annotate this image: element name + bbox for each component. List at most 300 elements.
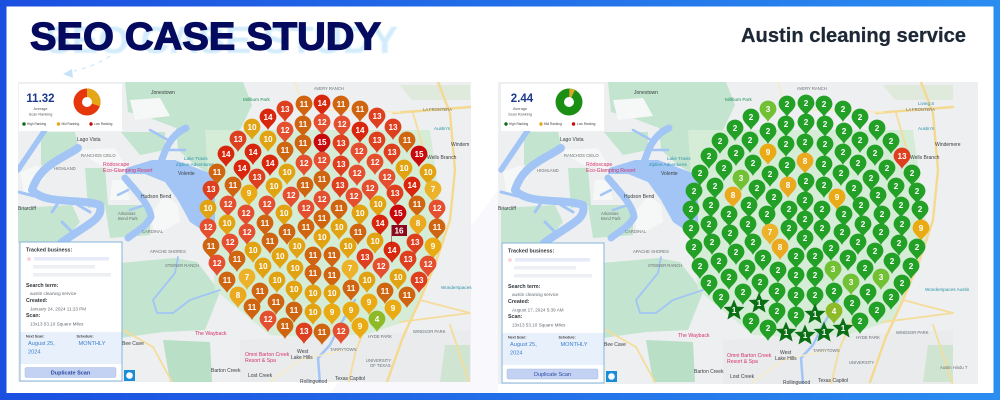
ranking pins: 2: [863, 264, 868, 273]
ranking pins: 10: [373, 200, 383, 209]
map labels: Resort & Spa: [727, 359, 758, 365]
ranking pins: 2: [803, 215, 808, 224]
donut chart: [74, 88, 101, 116]
ranking pins: 13: [387, 148, 397, 157]
map labels: Zipline Adventures: [649, 162, 687, 167]
ranking pins: 13: [372, 136, 382, 145]
next scan strip: August 25,: [28, 341, 55, 347]
map labels: Jonestown: [634, 90, 658, 96]
map labels: Ródoscape: [103, 162, 129, 168]
ranking pins: 7: [768, 228, 773, 237]
next scan strip: MONTHLY: [560, 342, 588, 348]
map labels: Austin Hindu T: [940, 365, 968, 370]
ranking pins: 10: [327, 289, 337, 298]
panel: right map (after): [483, 80, 1000, 390]
ranking pins: 10: [362, 276, 372, 285]
average score: 2.44: [511, 93, 534, 105]
ranking pins: 12: [370, 158, 380, 167]
map labels: TARRYTOWN: [813, 348, 840, 353]
ranking pins: 2: [755, 184, 760, 193]
ranking pins: 2: [852, 184, 857, 193]
ranking pins: 2: [846, 254, 851, 263]
ranking pins: 12: [423, 260, 433, 269]
blurred business details: [508, 258, 592, 278]
ranking pins: 2: [803, 196, 808, 205]
map labels: Hudson Bend: [141, 194, 172, 200]
panel: tracked business: January 24, 2024 11:23 PM: [30, 306, 86, 312]
ranking pins: 2: [823, 120, 828, 129]
ranking pins: 12: [286, 191, 296, 200]
ranking pins: 2: [747, 201, 752, 210]
ranking pins: 3: [849, 278, 854, 287]
ranking pins: 3: [879, 273, 884, 282]
map labels: Texas Capitol: [335, 376, 365, 382]
next scan strip: Schedule:: [76, 334, 94, 338]
ranking pins: 2: [689, 205, 694, 214]
average score: 11.32: [26, 93, 55, 105]
ranking pins: 2: [842, 210, 847, 219]
ranking pins: 11: [302, 223, 311, 232]
ranking pins: 10: [292, 242, 302, 251]
ranking pins: 13: [335, 181, 345, 190]
panel: tracked business: 13x13 53.10 Square Miles: [30, 322, 84, 326]
map labels: Wells Branch: [910, 155, 940, 161]
ranking pins: 10: [269, 182, 279, 191]
subtitle: Austin cleaning service: [741, 24, 966, 47]
map labels: UNIVERSITY: [366, 358, 391, 363]
ranking pins: 1: [822, 328, 827, 337]
title: SEO CASE STUDY: [45, 20, 398, 62]
ranking pins: 2: [698, 169, 703, 178]
ranking pins: 13: [206, 185, 216, 194]
ranking pins: 2: [775, 287, 780, 296]
icon: collapse button: [606, 371, 617, 382]
ranking pins: 9: [431, 242, 436, 251]
ranking pins: 2: [766, 324, 771, 333]
map labels: Eco-Glamping Resort: [103, 168, 153, 174]
ranking pins: 2: [727, 210, 732, 219]
donut chart: [556, 88, 582, 116]
map labels: Rollingwood: [300, 379, 327, 385]
ranking pins: 2: [787, 224, 792, 233]
ranking pins: 14: [317, 99, 327, 108]
ranking pins: 9: [247, 189, 252, 198]
ranking pins: 12: [317, 195, 327, 204]
ranking pins: 2: [840, 228, 845, 237]
map labels: APACHE SHORES: [150, 249, 186, 254]
panel: tracked business: [502, 243, 604, 383]
ranking pins: 2: [749, 113, 754, 122]
map labels: Lost Creek: [248, 373, 273, 379]
map labels: Volente: [178, 171, 195, 177]
ranking pins: 12: [354, 147, 364, 156]
panel: tracked business: austin cleaning service: [512, 292, 559, 297]
ranking pins: 2: [734, 248, 739, 257]
panel: tracked business: Created:: [26, 298, 48, 304]
ranking pins: 12: [212, 259, 222, 268]
ranking pins: 11: [403, 291, 412, 300]
ranking pins: 11: [266, 237, 275, 246]
ranking pins: 2: [842, 127, 847, 136]
ranking pins: 2: [866, 288, 871, 297]
panel: tracked business: Tracked business:: [26, 248, 72, 254]
ranking pins: 14: [248, 148, 258, 157]
ranking pins: 2: [776, 266, 781, 275]
ranking pins: 2: [785, 100, 790, 109]
ranking pins: 2: [839, 169, 844, 178]
panel: tracked business: Tracked business:: [508, 248, 554, 254]
map labels: Arkansas: [601, 211, 618, 216]
ranking pins: 13: [360, 253, 370, 262]
map labels: Omni Barton Creek: [245, 352, 290, 358]
ranking pins: 2: [728, 229, 733, 238]
ranking pins: 12: [352, 169, 362, 178]
ranking pins: 2: [850, 299, 855, 308]
ranking pins: 2: [734, 149, 739, 158]
ranking pins: 2: [717, 257, 722, 266]
ranking pins: 12: [337, 120, 347, 129]
next scan strip: [502, 333, 604, 365]
map labels: LA FRONTERA: [906, 107, 935, 112]
map labels: Wonderspaces: [441, 285, 472, 290]
ranking pins: 12: [336, 327, 346, 336]
ranking pins: 3: [766, 105, 771, 114]
map labels: LA FRONTERA: [423, 107, 452, 112]
ranking pins: 2: [915, 187, 920, 196]
ranking pins: 14: [387, 246, 397, 255]
ranking pins: 2: [794, 252, 799, 261]
ranking pins: 10: [275, 252, 285, 261]
ranking pins: 12: [382, 173, 392, 182]
ranking pins: 10: [290, 264, 300, 273]
map labels: STEINER RANCH: [165, 263, 199, 268]
ranking pins: 8: [778, 243, 783, 252]
ranking pins: 2: [879, 228, 884, 237]
ranking pins: 3: [831, 265, 836, 274]
ranking pins: 2: [741, 288, 746, 297]
ranking pins: 3: [739, 174, 744, 183]
map labels: Wonderspaces Austin: [925, 287, 970, 292]
ranking pins: 12: [241, 209, 251, 218]
map labels: Texas Capitol: [818, 378, 848, 384]
map labels: Jonestown: [151, 90, 175, 96]
ranking pins: 2: [875, 124, 880, 133]
ranking pins: 9: [391, 304, 396, 313]
ranking pins: 2: [698, 262, 703, 271]
ranking pins: 2: [841, 148, 846, 157]
map labels: Lake Travis: [184, 156, 208, 161]
ranking pins: 2: [856, 238, 861, 247]
ranking pins: 2: [787, 205, 792, 214]
ranking pins: 2: [751, 238, 756, 247]
ranking pins: 10: [355, 209, 365, 218]
ranking pins: 2: [858, 113, 863, 122]
ranking pins: 11: [328, 271, 337, 280]
ranking pins: 2: [918, 205, 923, 214]
ranking pins: 9: [358, 322, 363, 331]
map labels: Austin's: [918, 126, 935, 131]
ranking pins: 12: [263, 315, 273, 324]
ranking pins: 12: [299, 159, 309, 168]
ranking legend: Mid Ranking: [62, 122, 79, 126]
ranking pins: 11: [283, 228, 292, 237]
ranking pins: 10: [399, 164, 409, 173]
panel: tracked business: August 17, 2024 5:39 AM: [512, 308, 564, 312]
map labels: The Wayback: [195, 331, 227, 337]
ranking pins: 2: [899, 201, 904, 210]
ranking pins: 10: [289, 285, 299, 294]
ranking pins: 2: [765, 210, 770, 219]
ranking pins: 2: [768, 170, 773, 179]
ranking pins: 2: [803, 138, 808, 147]
ranking pins: 2: [710, 238, 715, 247]
ranking pins: 12: [365, 184, 375, 193]
ranking pins: 13: [280, 105, 290, 114]
next scan strip: 2024: [510, 350, 522, 356]
map labels: TARRYTOWN: [330, 347, 357, 352]
ranking pins: 11: [318, 175, 327, 184]
ranking pins: 11: [328, 251, 337, 260]
ranking pins: 13: [897, 152, 907, 161]
title: SEO CASE STUDY: [30, 16, 381, 58]
ranking pins: 4: [375, 315, 380, 324]
ranking pins: 2: [689, 224, 694, 233]
ranking legend: [22, 122, 113, 126]
ranking pins: 7: [245, 273, 250, 282]
ranking pins: 2: [900, 279, 905, 288]
ranking pins: 11: [347, 284, 356, 293]
ranking pins: 2: [909, 262, 914, 271]
ranking pins: 2: [733, 124, 738, 133]
map labels: CARDINAL: [142, 229, 164, 234]
ranking legend: High Ranking: [27, 122, 46, 126]
ranking pins: 14: [237, 164, 247, 173]
ranking pins: 2: [758, 278, 763, 287]
map labels: STEINER RANCH: [648, 263, 682, 268]
map labels: CARDINAL: [625, 229, 647, 234]
ranking pins: 11: [248, 303, 257, 312]
ranking pins: 8: [416, 219, 421, 228]
ranking pins: [200, 95, 445, 345]
map labels: Austin's: [434, 126, 451, 131]
ranking pins: 10: [334, 223, 344, 232]
ranking pins: 2: [889, 137, 894, 146]
ranking pins: 2: [719, 293, 724, 302]
ranking pins: 2: [829, 244, 834, 253]
ranking pins: 2: [794, 291, 799, 300]
ranking pins: 2: [804, 99, 809, 108]
ranking pins: 12: [432, 204, 442, 213]
ranking pins: 1: [784, 328, 789, 337]
ranking pins: 8: [803, 157, 808, 166]
next scan strip: August 25,: [510, 342, 537, 348]
ranking pins: 11: [318, 328, 327, 337]
ranking legend: [504, 122, 596, 126]
map labels: Barton Creek: [211, 368, 241, 374]
ranking pins: 10: [343, 242, 353, 251]
ranking pins: [683, 95, 929, 344]
ranking pins: 10: [272, 276, 282, 285]
map labels: AVERY RANCH: [314, 86, 344, 91]
next scan strip: MONTHLY: [78, 341, 106, 347]
ranking pins: 11: [299, 139, 308, 148]
map labels: WINDSOR PARK: [413, 329, 446, 334]
map labels: HYDE PARK: [856, 335, 880, 340]
ranking pins: 1: [841, 324, 846, 333]
ranking pins: 2: [915, 243, 920, 252]
ranking pins: 2: [861, 220, 866, 229]
map labels: The Wayback: [678, 333, 710, 339]
panel: tracked business: austin cleaning service: [30, 291, 77, 296]
map labels: Ródoscape: [586, 162, 612, 168]
ranking pins: 11: [337, 100, 346, 109]
panel: tracked business: Search term:: [26, 283, 59, 289]
ranking pins: 11: [281, 146, 290, 155]
ranking pins: 10: [317, 233, 327, 242]
ranking pins: 1: [813, 310, 818, 319]
map labels: Millburn Park: [725, 97, 753, 102]
ranking pins: 2: [832, 287, 837, 296]
panel: tracked business: Scan:: [508, 314, 523, 320]
panel: tracked business: Scan:: [26, 313, 41, 319]
ranking pins: 2: [794, 271, 799, 280]
map labels: Windem: [451, 142, 469, 148]
map labels: Eco-Glamping Resort: [586, 168, 636, 174]
ranking pins: 12: [242, 228, 252, 237]
map labels: Bend Park: [601, 216, 621, 221]
next scan strip: Next Scan:: [508, 336, 527, 340]
ranking pins: 2: [875, 306, 880, 315]
map labels: WINDSOR PARK: [896, 330, 929, 335]
ranking pins: 2: [822, 160, 827, 169]
button: duplicate scan: Duplicate Scan: [534, 372, 571, 378]
map labels: HYDE PARK: [368, 334, 392, 339]
ranking pins: 10: [370, 237, 380, 246]
panel: left map (before): [18, 82, 472, 384]
ranking pins: 11: [300, 100, 309, 109]
ranking pins: 13: [336, 139, 346, 148]
ranking pins: 13: [252, 173, 262, 182]
ranking pins: 2: [856, 159, 861, 168]
ranking pins: 2: [751, 159, 756, 168]
ranking pins: 14: [355, 126, 365, 135]
ranking pins: 2: [841, 105, 846, 114]
map labels: West: [297, 349, 309, 355]
ranking pins: 2: [709, 201, 714, 210]
ranking pins: 2: [885, 164, 890, 173]
legend card: [501, 84, 604, 131]
ranking legend: Low Ranking: [577, 122, 596, 126]
ranking pins: 2: [766, 127, 771, 136]
ranking pins: 9: [835, 193, 840, 202]
ranking pins: 14: [221, 150, 231, 159]
ranking pins: 14: [265, 159, 275, 168]
ranking pins: 13: [388, 123, 398, 132]
ranking pins: 11: [301, 181, 310, 190]
ranking pins: 15: [414, 150, 424, 159]
ranking pins: 2: [772, 193, 777, 202]
ranking pins: 10: [248, 246, 258, 255]
ranking pins: 13: [299, 327, 309, 336]
map labels: OF TEXAS: [370, 363, 391, 368]
ranking pins: 12: [225, 238, 235, 247]
ranking pins: 10: [393, 273, 403, 282]
map labels: APACHE SHORES: [633, 249, 669, 254]
ranking pins: 7: [348, 264, 353, 273]
map labels: Bend Park: [118, 216, 138, 221]
ranking pins: 2: [880, 210, 885, 219]
map labels: [18, 86, 472, 385]
ranking pins: 13: [372, 112, 382, 121]
ranking pins: 1: [803, 331, 808, 340]
ranking pins: 11: [213, 168, 222, 177]
ranking pins: 10: [308, 289, 318, 298]
ranking pins: 9: [349, 306, 354, 315]
ranking pins: 2: [761, 254, 766, 263]
ranking pins: 2: [692, 243, 697, 252]
ranking pins: 2: [873, 149, 878, 158]
ranking pins: 9: [367, 298, 372, 307]
ranking pins: 10: [263, 135, 273, 144]
map labels: Windemere: [935, 142, 961, 148]
ranking pins: 13: [233, 135, 243, 144]
ranking pins: 8: [786, 181, 791, 190]
map labels: Wells Branch: [427, 155, 457, 161]
ranking pins: 2: [746, 220, 751, 229]
next scan strip: [20, 332, 122, 364]
ranking pins: 12: [262, 200, 272, 209]
ranking pins: 1: [732, 306, 737, 315]
ranking pins: 2: [803, 234, 808, 243]
ranking pins: 13: [403, 255, 413, 264]
ranking pins: 2: [785, 161, 790, 170]
button: duplicate scan: Duplicate Scan: [51, 370, 91, 376]
ranking pins: 12: [317, 156, 327, 165]
ranking pins: 11: [256, 287, 265, 296]
ranking pins: 13: [414, 276, 424, 285]
ranking pins: 2: [822, 100, 827, 109]
ranking legend: High Ranking: [509, 122, 528, 126]
ranking pins: 11: [433, 223, 442, 232]
map labels: Volente: [661, 171, 678, 177]
panel: tracked business: Search term:: [508, 284, 541, 290]
map labels: [498, 86, 970, 386]
ranking pins: 11: [281, 322, 290, 331]
ranking pins: 14: [407, 181, 417, 190]
ranking pins: 2: [858, 136, 863, 145]
next scan strip: Schedule:: [558, 336, 576, 340]
legend card: Average: [513, 107, 527, 111]
map labels: Hudson Bend: [624, 194, 655, 200]
map labels: HIGHLAND: [54, 166, 76, 171]
ranking pins: 12: [317, 118, 327, 127]
ranking pins: 8: [236, 291, 241, 300]
ranking pins: 11: [207, 242, 216, 251]
map background: [483, 80, 1000, 390]
ranking pins: 2: [727, 273, 732, 282]
map labels: Living S: [918, 101, 934, 106]
ranking pins: 15: [393, 209, 403, 218]
ranking pins: 4: [832, 307, 837, 316]
map labels: RANCHOS CIELO: [81, 153, 116, 158]
legend card: Scan Ranking: [508, 112, 532, 116]
panel: tracked business: Created:: [508, 299, 530, 305]
map labels: Millburn Park: [243, 97, 271, 102]
ranking pins: 12: [349, 192, 359, 201]
ranking pins: 11: [223, 276, 232, 285]
icon: collapse button: [124, 370, 135, 381]
ranking pins: 14: [375, 219, 385, 228]
